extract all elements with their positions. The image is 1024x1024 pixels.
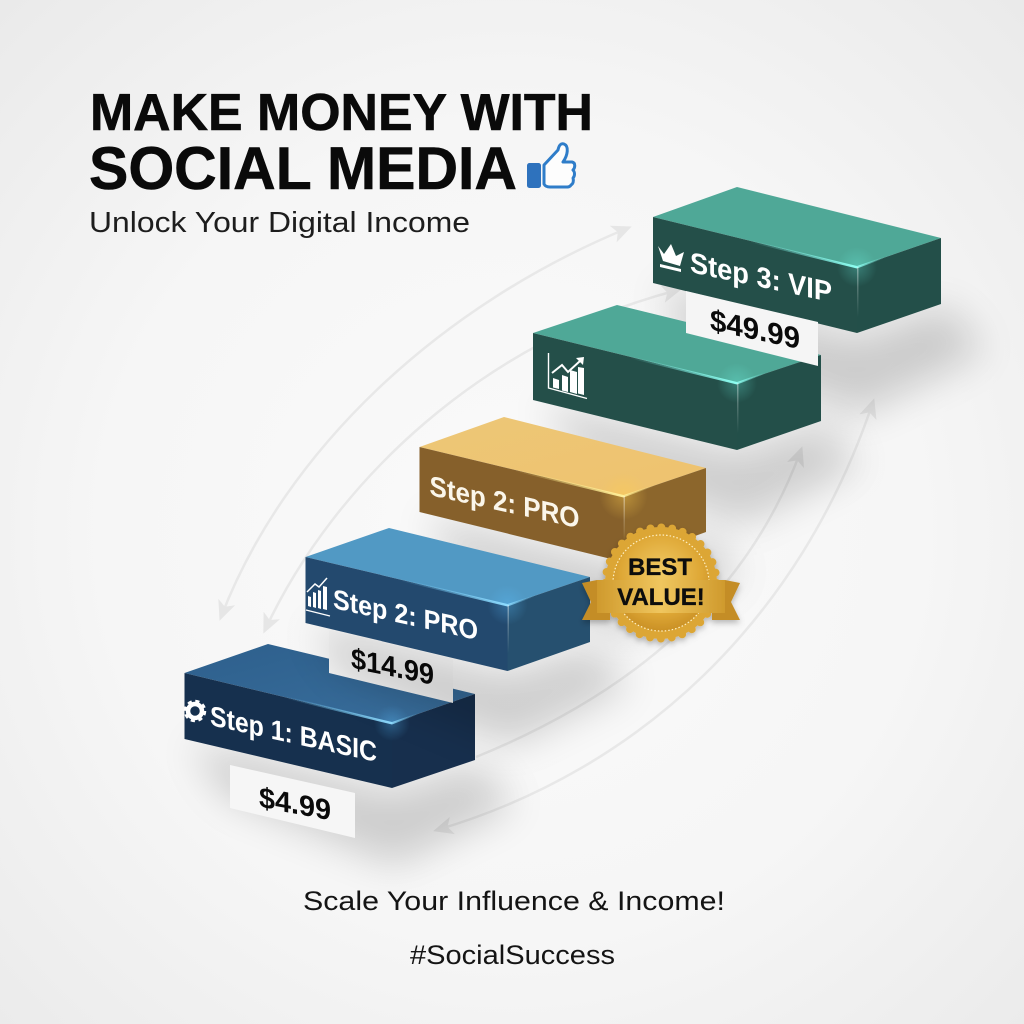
label: step 3: Step 3: VIP xyxy=(690,246,832,309)
badge text: BEST xyxy=(628,554,692,581)
panel: green chart block xyxy=(533,305,860,525)
title xyxy=(89,84,593,202)
ribbon xyxy=(582,580,740,620)
title: MAKE MONEY WITH xyxy=(90,84,593,142)
icon: growth chart xyxy=(548,353,587,398)
price tag: $14.99 xyxy=(329,630,453,703)
subtitle: Unlock Your Digital Income xyxy=(89,207,470,239)
price tag: $4.99 xyxy=(230,765,355,838)
price tag: $4.99: $4.99 xyxy=(259,782,331,827)
icon: thumbs up xyxy=(527,144,575,188)
panel: gold step 2 block xyxy=(420,417,740,635)
price tag: $14.99: $14.99 xyxy=(351,642,434,692)
label: gold step 2: Step 2: PRO xyxy=(430,470,580,535)
panel: step 3 VIP block xyxy=(653,187,985,415)
title: SOCIAL MEDIA xyxy=(89,135,517,202)
icon: small chart xyxy=(306,578,330,616)
panel: blue step 2 block xyxy=(306,528,630,745)
icon: gear xyxy=(186,702,204,720)
badge text: VALUE! xyxy=(617,584,705,611)
badge: best value xyxy=(582,527,740,639)
tagline: Scale Your Influence & Income! xyxy=(303,886,725,916)
price tag: $49.99: $49.99 xyxy=(710,304,800,356)
badge text xyxy=(617,554,705,611)
price tag: $49.99 xyxy=(686,291,818,366)
icon: crown xyxy=(658,244,684,272)
panel: step 1 basic block xyxy=(184,644,515,865)
label: blue step 2: Step 2: PRO xyxy=(333,583,478,646)
hashtag: #SocialSuccess xyxy=(410,940,615,970)
label: step 1: Step 1: BASIC xyxy=(210,700,377,769)
cycle arrows xyxy=(221,228,873,830)
